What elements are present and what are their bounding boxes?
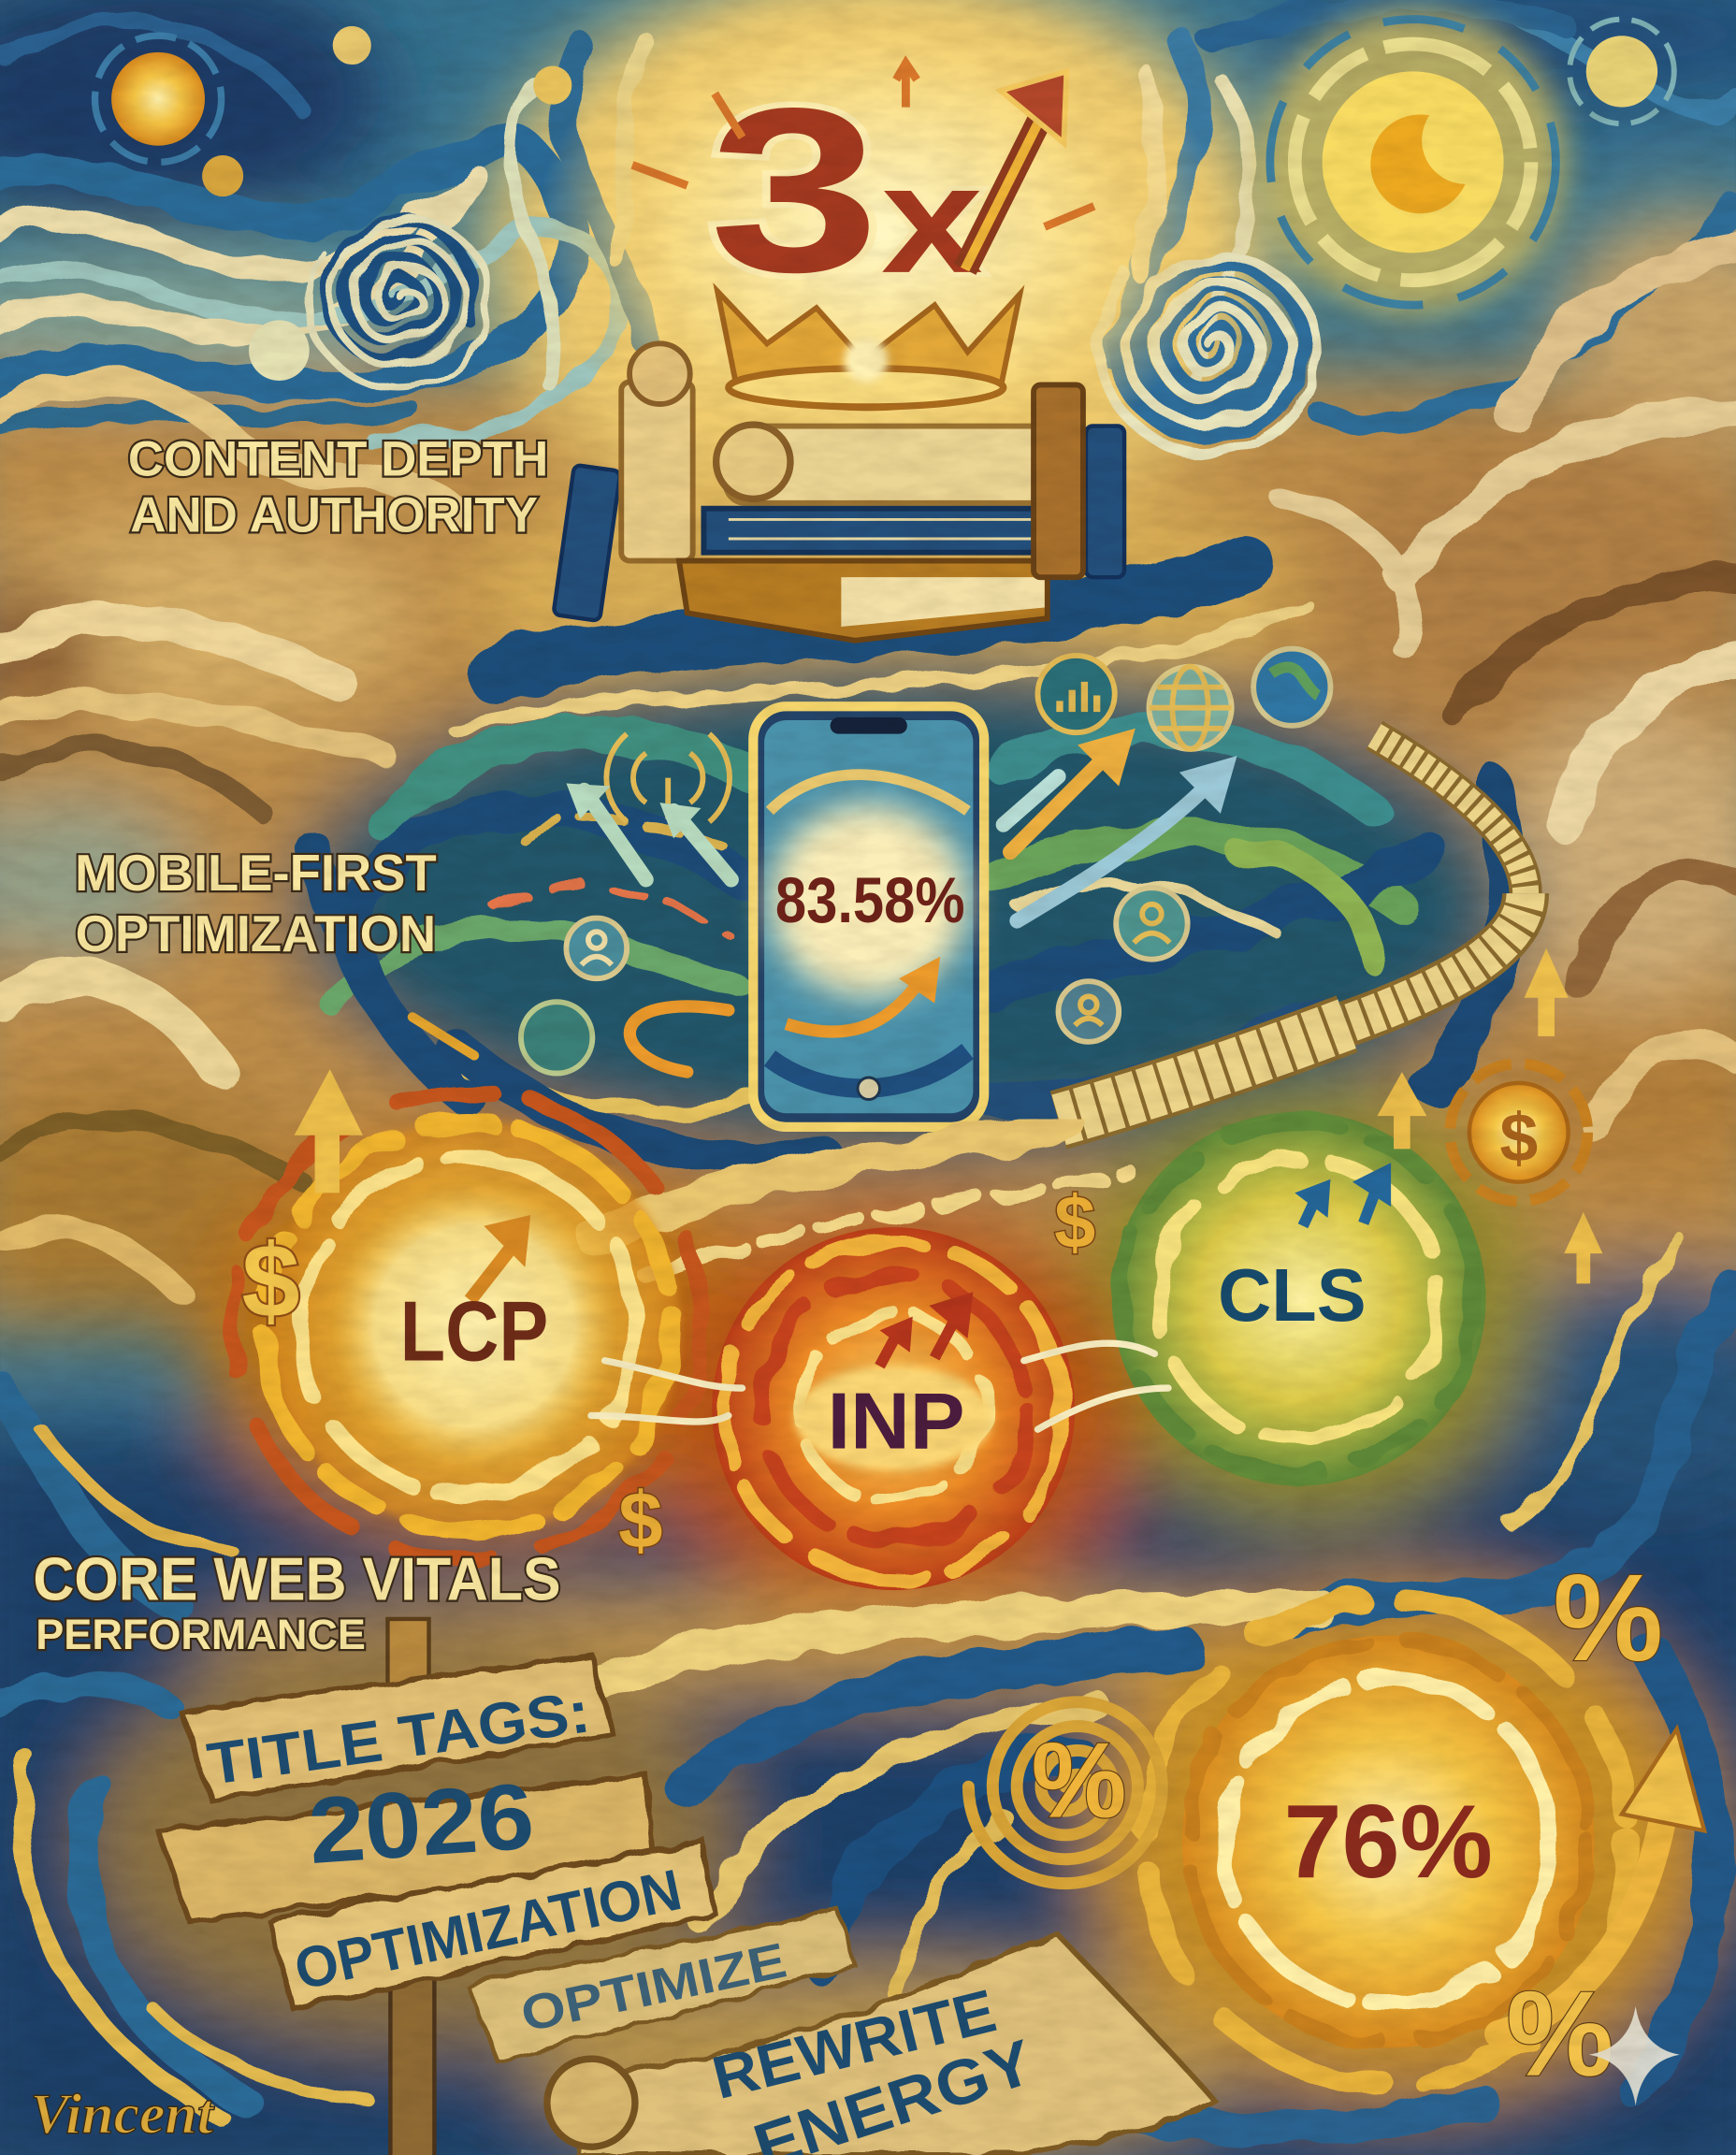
sign board: optimization: OPTIMIZATION: [289, 1858, 687, 2003]
star cluster: [202, 20, 1674, 381]
banner: optimize: OPTIMIZE: [516, 1932, 791, 2043]
star: top-left moon: [94, 36, 222, 162]
vital: CLS orb: [1112, 1112, 1485, 1485]
heading number: 3x with rising arrow: x: [881, 133, 983, 305]
icon: leaf globe: [521, 1002, 592, 1074]
icon: signal tower: [606, 734, 730, 822]
label: mobile-first optimization: [75, 845, 437, 962]
signpost: title tags 2026 optimization: [158, 1619, 715, 2155]
sign board: 2026: [158, 1764, 655, 1921]
icon: globe grid: [1149, 667, 1232, 749]
sparkle mark: [1589, 2006, 1680, 2105]
icon: signal and network nodes: [521, 649, 1330, 1074]
sign board: 2026: 2026: [305, 1764, 537, 1884]
flow lines between orbs: [591, 1343, 1168, 1429]
icon: books and scrolls: [554, 343, 1124, 641]
label: core web vitals performance: PERFORMANCE: [36, 1611, 366, 1658]
heading number: 3x with rising arrow: [632, 59, 1094, 320]
vital: CLS orb: CLS: [1218, 1253, 1367, 1337]
label: content depth and authority: AND AUTHORITY: [130, 488, 538, 543]
scroll: rewrite energy: [547, 1935, 1216, 2155]
icon: user lower: [1059, 981, 1119, 1042]
golden staircase: [1059, 735, 1526, 1121]
scroll: rewrite energy: REWRITE: [705, 1975, 1003, 2112]
icon: dollar signs: $: [618, 1477, 663, 1566]
swirl: 76%: 76%: [1283, 1783, 1493, 1900]
icon: coin: $: [1499, 1099, 1538, 1177]
sign board: title tags: [181, 1655, 613, 1801]
icon: dollar signs: [618, 1180, 1095, 1566]
swirl: small percent left: %: [1032, 1721, 1127, 1841]
vital: LCP orb: LCP: [400, 1285, 548, 1380]
swirl: 76%: [1147, 1599, 1704, 2084]
label: mobile-first optimization: MOBILE-FIRST: [75, 845, 437, 902]
sign board: title tags: TITLE TAGS:: [204, 1679, 594, 1798]
rising arrows around orbs: [295, 948, 1602, 1283]
cloud brush strokes: [0, 247, 1736, 1292]
icon: coin: [1450, 1063, 1587, 1201]
crescent moon: [1259, 8, 1567, 316]
sky swirl brush strokes: [0, 3, 1736, 499]
vital: INP orb: INP: [828, 1378, 965, 1467]
label: mobile-first optimization: OPTIMIZATION: [76, 905, 436, 962]
icon: percent top right: %: [1553, 1549, 1663, 1687]
phone with 83.58%: 83.58%: [775, 863, 965, 936]
heading number: 3x with rising arrow: 3: [709, 59, 879, 320]
label: core web vitals performance: [33, 1544, 561, 1658]
icon: user right: [1116, 888, 1188, 960]
label: content depth and authority: [128, 431, 548, 543]
icon: earth: [1253, 649, 1330, 726]
icon: percent bottom right: %: [1506, 1967, 1613, 2102]
vital: LCP orb: [234, 1092, 701, 1560]
banner: optimize: [468, 1910, 855, 2061]
icon: user left: [566, 918, 627, 978]
icon: bar chart: [1037, 656, 1115, 732]
central blue-green vortex: [316, 563, 1509, 1157]
phone with 83.58%: [753, 706, 984, 1127]
swirl: small percent left: [968, 1702, 1162, 1884]
bottom swirling brush strokes: [0, 1237, 1736, 2128]
central glow: [536, 0, 1223, 495]
icon: golden crown: [717, 292, 1020, 408]
label: content depth and authority: CONTENT DEPTH: [128, 431, 548, 486]
vital: INP orb: [712, 1227, 1075, 1590]
golden path under the phone: [591, 1127, 1127, 1279]
arrows around the phone: [412, 729, 1237, 1072]
signature: Vincent: [30, 2082, 215, 2146]
icon: dollar signs: $: [1054, 1180, 1095, 1264]
label: core web vitals performance: CORE WEB VITALS: [33, 1544, 561, 1613]
icon: dollar left: $: [241, 1222, 300, 1339]
